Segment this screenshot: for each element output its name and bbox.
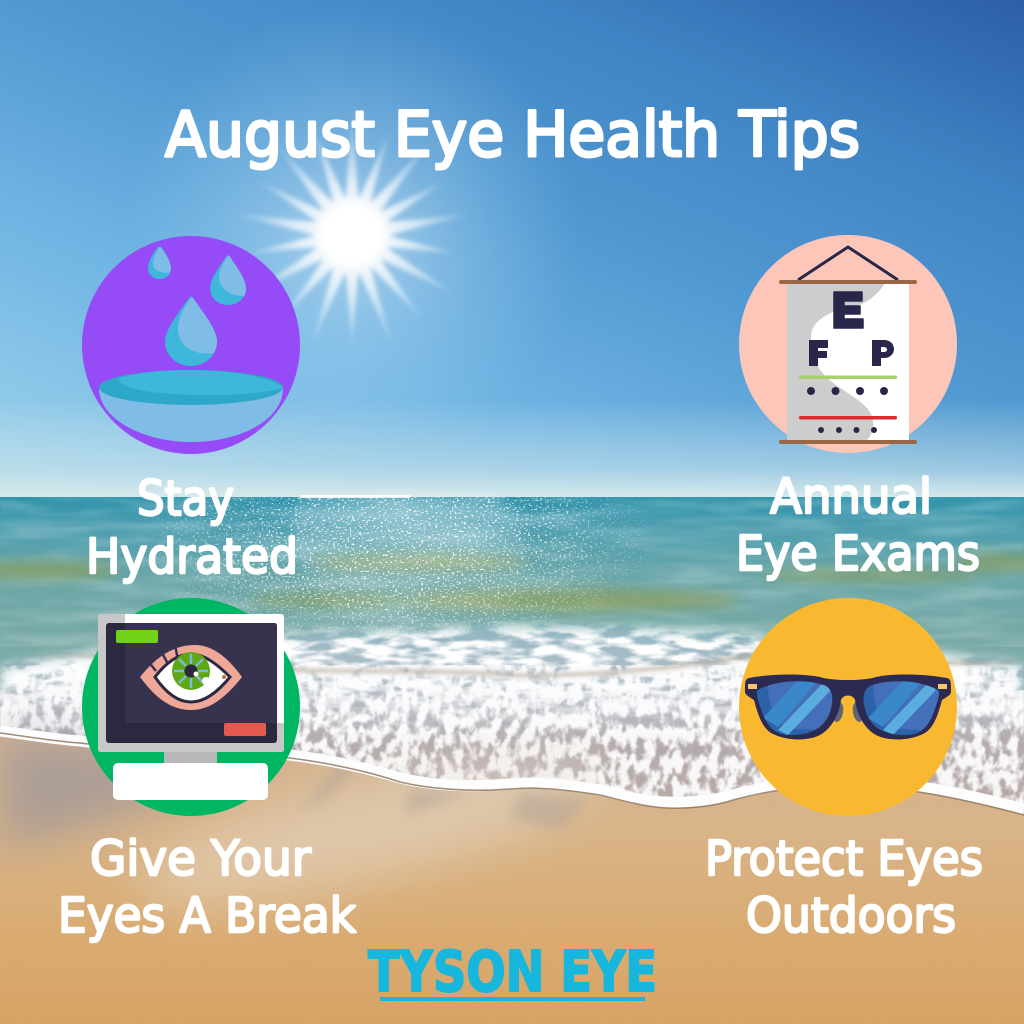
label [58, 831, 356, 944]
logo [368, 940, 657, 1005]
sun disc [318, 201, 386, 269]
lash gaps [147, 645, 178, 671]
tip: stay hydrated [82, 236, 300, 585]
right lens [864, 681, 940, 735]
label [736, 469, 980, 582]
green line [799, 376, 897, 379]
small drop [148, 246, 171, 279]
stand [164, 752, 217, 763]
sun rays [227, 115, 477, 351]
red line [799, 416, 897, 420]
sky [0, 0, 1024, 498]
red button [224, 723, 266, 736]
iris spokes [174, 654, 208, 688]
logo wordmark: TYSON EYE [368, 940, 657, 1005]
iris [172, 652, 210, 690]
sparkles [139, 497, 660, 638]
keyboard [113, 763, 268, 800]
top rod [779, 280, 917, 284]
sand [0, 733, 1024, 1024]
label: Protect Eyes [705, 831, 983, 887]
nose pads [831, 701, 865, 723]
eye white [155, 654, 230, 702]
pink circle [739, 235, 957, 453]
monitor body [98, 614, 284, 752]
screen [106, 623, 277, 743]
wave texture [0, 497, 1024, 647]
chart shading [787, 283, 885, 441]
label: Give Your [90, 831, 311, 887]
label: Outdoors [746, 888, 956, 944]
glare [202, 677, 210, 685]
green button [116, 630, 158, 643]
left lens [756, 681, 832, 735]
letter F [809, 340, 828, 366]
icon: water drops and bowl [82, 236, 300, 454]
tip: give your eyes a break [58, 598, 356, 944]
monitor shading [98, 614, 284, 752]
eye [140, 645, 242, 710]
label: Eyes A Break [58, 888, 356, 944]
olive wave bands [0, 553, 1024, 611]
tip: protect eyes outdoors [705, 598, 983, 944]
icon: monitor with eye [82, 598, 300, 816]
letter P [872, 340, 894, 366]
chart paper [787, 283, 909, 441]
wave edge [0, 731, 1024, 809]
outer lid [140, 645, 242, 710]
hanger [798, 247, 898, 280]
large drop [165, 296, 217, 366]
letter E [834, 292, 863, 328]
sand grain [0, 733, 1024, 1024]
wave shadow streaks [300, 765, 590, 830]
green circle [82, 598, 300, 816]
tear duct [222, 675, 226, 679]
row of large dots [807, 387, 888, 395]
label: Annual [770, 469, 932, 525]
foam [0, 620, 1024, 835]
left hinge [748, 684, 757, 689]
logo underline [380, 997, 645, 1001]
pupil [184, 664, 198, 678]
bowl [99, 388, 283, 442]
icon: eye chart [739, 235, 957, 453]
pale wet sand [125, 723, 615, 937]
grey sand corner [0, 733, 260, 850]
yellow circle [739, 598, 957, 816]
highlights [194, 672, 198, 676]
right drop [210, 255, 246, 305]
horizon glare [300, 495, 410, 498]
screen highlight [125, 623, 277, 723]
purple circle [82, 236, 300, 454]
sun glow [122, 5, 582, 465]
tip: annual eye exams [736, 235, 980, 582]
row of small dots [818, 427, 877, 433]
icon: sunglasses [739, 598, 957, 816]
label: Hydrated [86, 529, 298, 585]
sun glint on water [293, 497, 529, 650]
wet edge line [0, 733, 1024, 815]
title: August Eye Health Tips [165, 98, 860, 171]
sea [0, 497, 1024, 767]
horizon haze [0, 400, 1024, 498]
frame [745, 674, 951, 739]
bottom rod [779, 440, 917, 444]
label: Stay [137, 471, 234, 527]
label: Eye Exams [736, 526, 980, 582]
label [86, 471, 298, 585]
bowl water [99, 370, 283, 405]
label [705, 831, 983, 944]
right hinge [938, 684, 947, 689]
